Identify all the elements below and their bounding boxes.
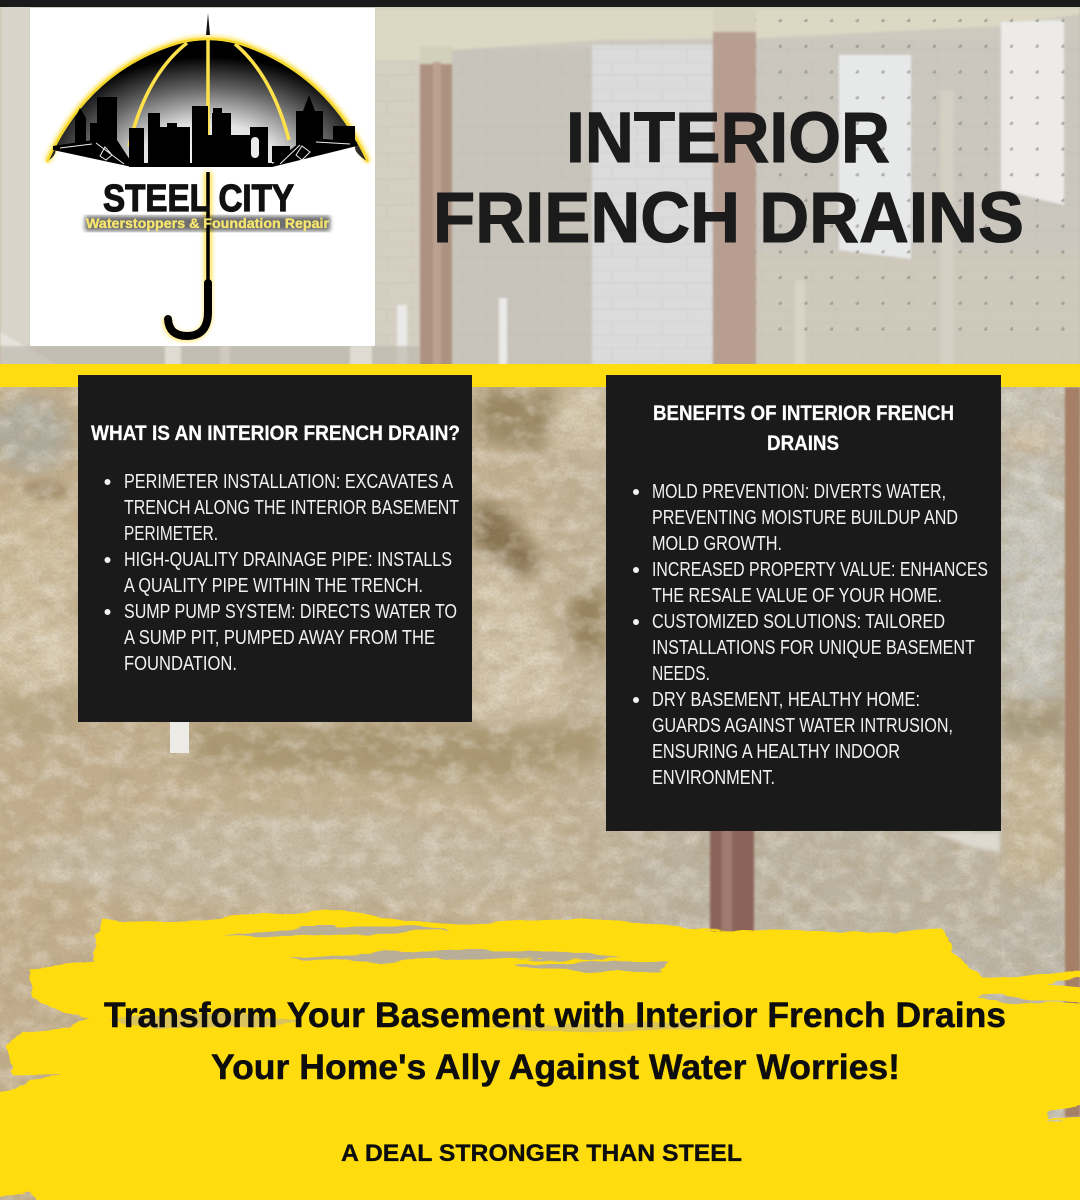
panel heading: BENEFITS OF INTERIOR FRENCH xyxy=(653,401,954,425)
steel columns xyxy=(420,8,1080,1117)
bullet list xyxy=(633,481,988,789)
bullet list: CUSTOMIZED SOLUTIONS: TAILORED xyxy=(652,611,945,633)
title: FRIENCH DRAINS xyxy=(433,179,1024,258)
title: INTERIOR xyxy=(566,99,890,178)
bullet list: HIGH-QUALITY DRAINAGE PIPE: INSTALLS xyxy=(124,549,452,571)
logo wordmark: Waterstoppers & Foundation Repair xyxy=(86,216,330,231)
bullet list: DRY BASEMENT, HEALTHY HOME: xyxy=(652,689,920,711)
bridges xyxy=(53,139,357,167)
panel heading: DRAINS xyxy=(767,431,839,455)
panel heading xyxy=(653,401,954,455)
bullet list: TRENCH ALONG THE INTERIOR BASEMENT xyxy=(124,497,459,519)
yellow horizontal band xyxy=(0,364,1080,387)
panel heading: WHAT IS AN INTERIOR FRENCH DRAIN? xyxy=(91,421,460,445)
wall area xyxy=(0,0,1080,366)
title xyxy=(433,99,1024,258)
yellow paint brush banner xyxy=(0,911,1080,1200)
bullet list: INCREASED PROPERTY VALUE: ENHANCES xyxy=(652,559,988,581)
bullet list: INSTALLATIONS FOR UNIQUE BASEMENT xyxy=(652,637,975,659)
bullet list: PREVENTING MOISTURE BUILDUP AND xyxy=(652,507,958,529)
bullet list: GUARDS AGAINST WATER INTRUSION, xyxy=(652,715,953,737)
bullet list: MOLD PREVENTION: DIVERTS WATER, xyxy=(652,481,946,503)
brush streak gaps xyxy=(110,926,760,1032)
bullet list: NEEDS. xyxy=(652,663,710,685)
panel: benefits of interior french drains xyxy=(606,375,1001,831)
dirt floor xyxy=(0,387,1080,1200)
bullet list: THE RESALE VALUE OF YOUR HOME. xyxy=(652,585,942,607)
bullet list: ENVIRONMENT. xyxy=(652,767,775,789)
bullet list: MOLD GROWTH. xyxy=(652,533,782,555)
tagline: A DEAL STRONGER THAN STEEL xyxy=(341,1140,742,1167)
bullet list: A SUMP PIT, PUMPED AWAY FROM THE xyxy=(124,627,435,649)
logo wordmark: STEEL CITY xyxy=(103,178,294,220)
call to action headline: Transform Your Basement with Interior French Drains xyxy=(104,996,1006,1035)
logo: Steel City umbrella xyxy=(30,8,375,346)
bullet list: ENSURING A HEALTHY INDOOR xyxy=(652,741,900,763)
bullet list: PERIMETER. xyxy=(124,523,218,545)
call to action headline xyxy=(104,996,1006,1087)
bullet list: FOUNDATION. xyxy=(124,653,237,675)
bullet list: A QUALITY PIPE WITHIN THE TRENCH. xyxy=(124,575,423,597)
top dark bar xyxy=(0,0,1080,7)
icon: umbrella handle xyxy=(167,172,208,337)
call to action headline: Your Home's Ally Against Water Worries! xyxy=(211,1048,900,1087)
icon: umbrella canopy with skyline xyxy=(47,13,368,167)
panel: what is an interior french drain xyxy=(78,375,472,722)
white pipe xyxy=(170,722,189,753)
dotted pattern xyxy=(752,18,1080,338)
skyline xyxy=(75,95,355,167)
bullet list: PERIMETER INSTALLATION: EXCAVATES A xyxy=(124,471,454,493)
bullet list: SUMP PUMP SYSTEM: DIRECTS WATER TO xyxy=(124,601,457,623)
bullet list xyxy=(104,471,459,675)
